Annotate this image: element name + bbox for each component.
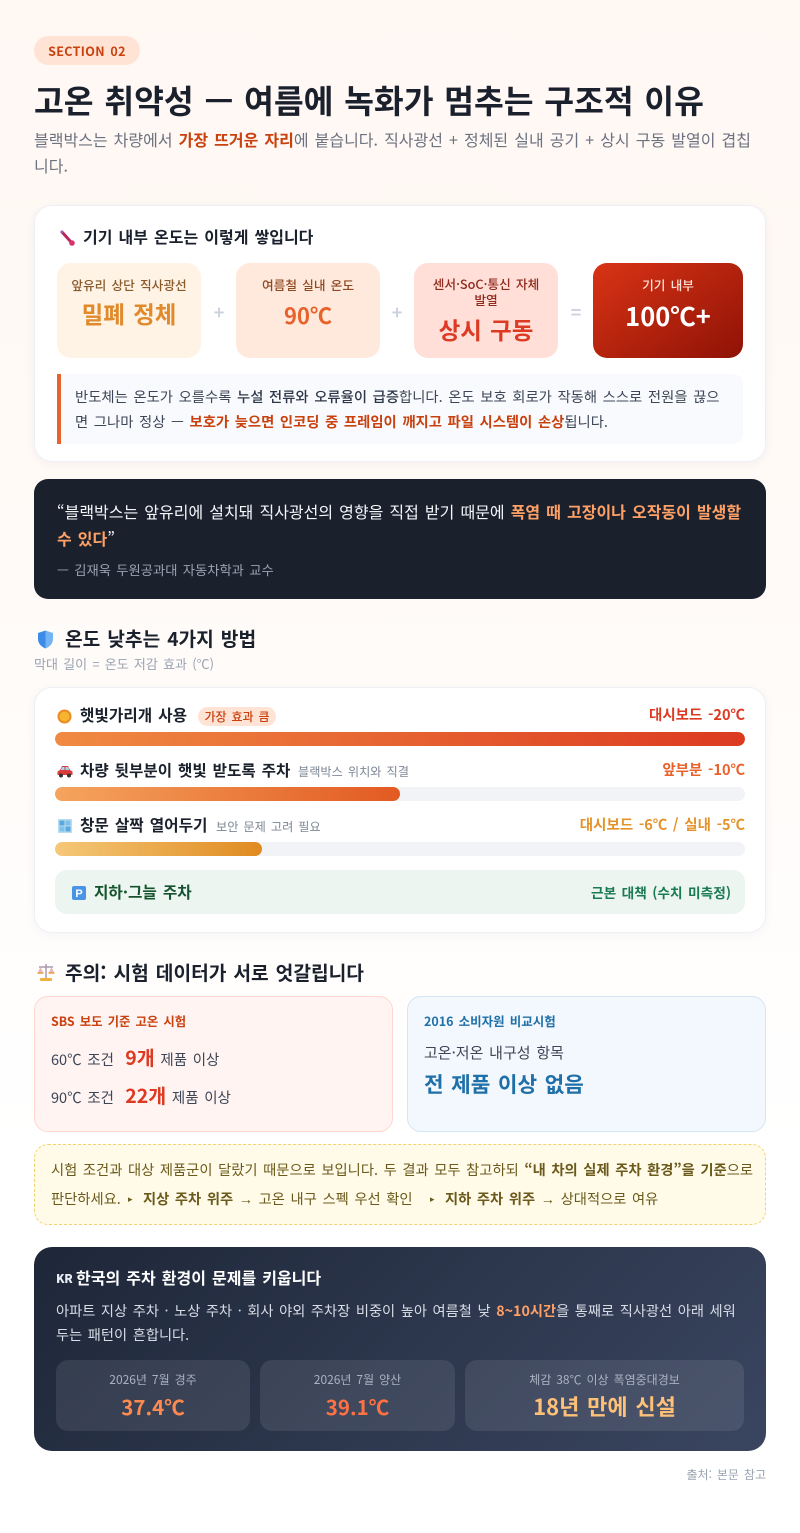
bar — [55, 732, 745, 746]
row 1: sunshade — [55, 703, 745, 746]
value: 대시보드 -6℃ / 실내 -5℃ — [580, 814, 745, 835]
icon: thermometer — [60, 230, 75, 246]
equation term: self heating: 센서·SoC·통신 자체 — [433, 274, 539, 293]
equation term: self heating: 상시 구동 — [439, 312, 533, 346]
label: 햇빛가리개 사용 — [80, 703, 187, 726]
panel: SBS test — [34, 996, 393, 1132]
60C result: 60℃ 조건 9개 제품 이상 — [51, 1042, 219, 1071]
stat: Yangsan: 39.1℃ — [326, 1391, 389, 1421]
90C result: 90℃ 조건 22개 제품 이상 — [51, 1080, 231, 1109]
equation term: direct sunlight: 밀폐 정체 — [82, 296, 176, 330]
icon: parking: P — [75, 888, 83, 900]
stat: Gyeongju: 2026년 7월 경주 — [109, 1371, 197, 1388]
stat: Gyeongju — [56, 1360, 250, 1431]
panel body: 두는 패턴이 흔합니다. — [56, 1324, 189, 1345]
stat: Yangsan: 2026년 7월 양산 — [314, 1371, 401, 1388]
stat: heat warning — [465, 1360, 744, 1431]
equation result: device internal — [593, 263, 743, 358]
stat: Gyeongju: 37.4℃ — [121, 1391, 185, 1421]
label: 창문 살짝 열어두기 — [80, 813, 207, 836]
operator equals: = — [571, 299, 581, 325]
equation term: direct sunlight: 앞유리 상단 직사광선 — [71, 275, 187, 294]
panel: cooling methods bar chart — [34, 687, 766, 933]
quote text — [57, 499, 741, 550]
expert quote panel — [34, 479, 766, 599]
advice callout: 시험 조건과 대상 제품군이 달랐기 때문으로 보입니다. 두 결과 모두 참고하되 “내 차의 실제 주차 환경”을 기준으로 — [51, 1159, 753, 1180]
panel: Korean parking environment — [34, 1247, 766, 1451]
icon: car — [58, 766, 72, 778]
panel heading: temperature build-up: 기기 내부 온도는 이렇게 쌓입니다 — [83, 224, 313, 248]
chart caption: 막대 길이 = 온도 저감 효과 (℃) — [34, 654, 214, 673]
badge: most effective: 가장 효과 큼 — [204, 708, 270, 725]
label: 차량 뒷부분이 햇빛 받도록 주차 — [80, 759, 290, 781]
advice callout: 지하 주차 위주 → 상대적으로 여유 — [445, 1188, 658, 1209]
subtitle: 니다. — [34, 153, 68, 177]
quote text: “블랙박스는 앞유리에 설치돼 직사광선의 영향을 직접 받기 때문에 폭염 때 고장이나 오작동이 발생할 — [57, 499, 741, 523]
note: 보안 문제 고려 필요 — [216, 817, 321, 835]
equation term: cabin temperature: 90℃ — [284, 299, 332, 331]
panel body: 아파트 지상 주차 · 노상 주차 · 회사 야외 주차장 비중이 높아 여름철 낮 8~10시간을 통째로 직사광선 아래 세워 — [56, 1300, 736, 1321]
source note: 출처: 본문 참고 — [686, 1466, 766, 1483]
note: 블랙박스 위치와 직결 — [298, 762, 409, 780]
operator plus: + — [214, 299, 224, 325]
advice callout: ▸ — [430, 1192, 435, 1205]
section heading: caution: 주의: 시험 데이터가 서로 엇갈립니다 — [65, 958, 364, 986]
panel body — [56, 1300, 736, 1345]
panel heading: 한국의 주차 환경이 문제를 키웁니다 — [76, 1265, 321, 1289]
equation term: self heating — [414, 263, 558, 358]
row 2: rear-facing parking — [55, 759, 745, 801]
result: 전 제품 이상 없음 — [424, 1068, 584, 1099]
explanation note: 면 그나마 정상 — 보호가 늦으면 인코딩 중 프레임이 깨지고 파일 시스템이 손상됩니다. — [75, 411, 608, 432]
advice callout: 지상 주차 위주 → 고온 내구 스펙 우선 확인 — [143, 1188, 413, 1209]
equation term: direct sunlight — [57, 263, 201, 358]
test items: 고온·저온 내구성 항목 — [424, 1042, 564, 1063]
equation result: device internal: 기기 내부 — [642, 275, 694, 294]
section heading: cooling methods: 온도 낮추는 4가지 방법 — [65, 624, 256, 652]
equation term: cabin temperature: 여름철 실내 온도 — [262, 275, 354, 294]
operator plus: + — [392, 299, 402, 325]
stat: heat warning: 18년 만에 신설 — [533, 1390, 676, 1422]
value: 대시보드 -20℃ — [649, 704, 745, 725]
stat: Yangsan — [260, 1360, 455, 1431]
row 4: underground parking — [55, 870, 745, 914]
stat: heat warning: 체감 38℃ 이상 폭염중대경보 — [529, 1371, 680, 1388]
equation result: device internal: 100℃+ — [625, 297, 711, 334]
icon: shield — [38, 630, 53, 648]
quote attribution: — 김재욱 두원공과대 자동차학과 교수 — [57, 560, 274, 579]
label: 지하·그늘 주차 — [94, 880, 192, 903]
icon: parking — [72, 886, 86, 900]
row 3: cracked window — [55, 813, 745, 856]
panel label: SBS 보도 기준 고온 시험 — [51, 1012, 186, 1030]
subtitle: 블랙박스는 차량에서 가장 뜨거운 자리에 붙습니다. 직사광선 + 정체된 실내 공기 + 상시 구동 발열이 겹칩 — [34, 127, 751, 151]
equation term: self heating: 발열 — [474, 290, 498, 309]
advice callout — [34, 1144, 766, 1225]
advice callout: 판단하세요. — [51, 1188, 121, 1209]
section badge — [34, 36, 140, 65]
explanation note — [57, 374, 743, 444]
advice callout: ▸ — [128, 1192, 133, 1205]
title: 고온 취약성 — 여름에 녹화가 멈추는 구조적 이유 — [34, 76, 704, 123]
icon: window — [58, 819, 72, 833]
quote text: 수 있다” — [57, 526, 115, 550]
equation term: cabin temperature — [236, 263, 380, 358]
value: 근본 대책 (수치 미측정) — [591, 882, 731, 902]
subtitle — [34, 127, 751, 177]
panel: consumer agency test — [407, 996, 766, 1132]
section badge: SECTION 02 — [48, 41, 126, 60]
icon: KR flag letters: KR — [56, 1270, 72, 1287]
panel label: 2016 소비자원 비교시험 — [424, 1011, 556, 1030]
panel: internal temperature — [34, 205, 766, 462]
icon: sun — [58, 710, 72, 724]
bar — [55, 787, 745, 801]
icon: scales — [38, 964, 54, 981]
explanation note: 반도체는 온도가 오를수록 누설 전류와 오류율이 급증합니다. 온도 보호 회로가 작동해 스스로 전원을 끊으 — [75, 386, 719, 407]
value: 앞부분 -10℃ — [662, 759, 745, 780]
bar — [55, 842, 745, 856]
